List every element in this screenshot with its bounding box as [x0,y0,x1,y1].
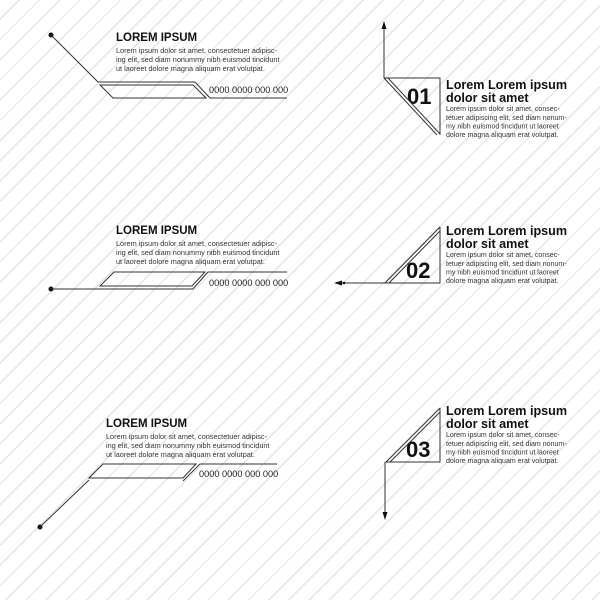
badge 01: 01 [407,84,431,109]
body r2: Lorem ipsum dolor sit amet, consec- [446,252,560,259]
body r1: tetuer adipiscing elit, sed diam nonum- [446,115,567,122]
body r1: dolore magna aliquam erat volutpat. [446,132,558,139]
connector line 1 [48,32,287,98]
badge 03 [386,408,440,462]
heading r3: dolor sit amet [446,417,529,431]
body text 3: ut laoreet dolore magna aliquam erat volutpat. [106,450,255,459]
badge 02 [385,227,440,283]
panel: left 1 [48,32,288,98]
heading r1: Lorem Lorem ipsum [446,78,567,92]
connector line 2 [48,272,287,292]
panel: left 2 [48,225,288,292]
arrow down [382,462,388,520]
heading r3: Lorem Lorem ipsum [446,404,567,418]
panel: right 2 [334,224,567,286]
panel: right 1 [382,21,567,139]
body text 2: Lorem ipsum dolor sit amet, consectetuer adipisc- [116,239,278,248]
body r1: Lorem ipsum dolor sit amet, consec- [446,106,560,113]
body r3: dolore magna aliquam erat volutpat. [446,458,558,465]
number 3: 0000 0000 000 000 [199,469,278,479]
panel: right 3 [382,404,567,520]
body r2: my nibh euismod tincidunt ut laoreet [446,270,559,276]
heading r2: Lorem Lorem ipsum [446,224,567,238]
body text 1: ing elit, sed diam nonummy nibh euismod tincidunt [116,55,279,64]
body text 1: ut laoreet dolore magna aliquam erat volutpat. [116,64,265,73]
body text 1: Lorem ipsum dolor sit amet, consectetuer adipisc- [116,46,278,55]
badge 01 [384,78,440,135]
heading r1: dolor sit amet [446,91,529,105]
body r3: my nibh euismod tincidunt ut laoreet [446,450,559,456]
body text 2: ut laoreet dolore magna aliquam erat volutpat. [116,257,265,266]
connector line 3 [38,464,277,530]
body r3: Lorem ipsum dolor sit amet, consec- [446,432,560,439]
arrow left [334,280,385,286]
badge 03: 03 [406,437,430,462]
body r3: tetuer adipiscing elit, sed diam nonum- [446,441,567,448]
heading 3: LOREM IPSUM [106,418,187,430]
heading r2: dolor sit amet [446,237,529,251]
panel: left 3 [38,418,278,530]
body text 3: Lorem ipsum dolor sit amet, consectetuer adipisc- [106,432,268,441]
badge 02: 02 [406,258,430,283]
number 1: 0000 0000 000 000 [209,85,288,95]
number 2: 0000 0000 000 000 [209,278,288,288]
body text 3: ing elit, sed diam nonummy nibh euismod tincidunt [106,441,269,450]
arrow up [382,21,386,78]
body text 2: ing elit, sed diam nonummy nibh euismod tincidunt [116,248,279,257]
body r2: dolore magna aliquam erat volutpat. [446,278,558,285]
body r2: tetuer adipiscing elit, sed diam nonum- [446,261,567,268]
heading 2: LOREM IPSUM [116,225,197,237]
heading 1: LOREM IPSUM [116,32,197,44]
body r1: my nibh euismod tincidunt ut laoreet [446,124,559,130]
